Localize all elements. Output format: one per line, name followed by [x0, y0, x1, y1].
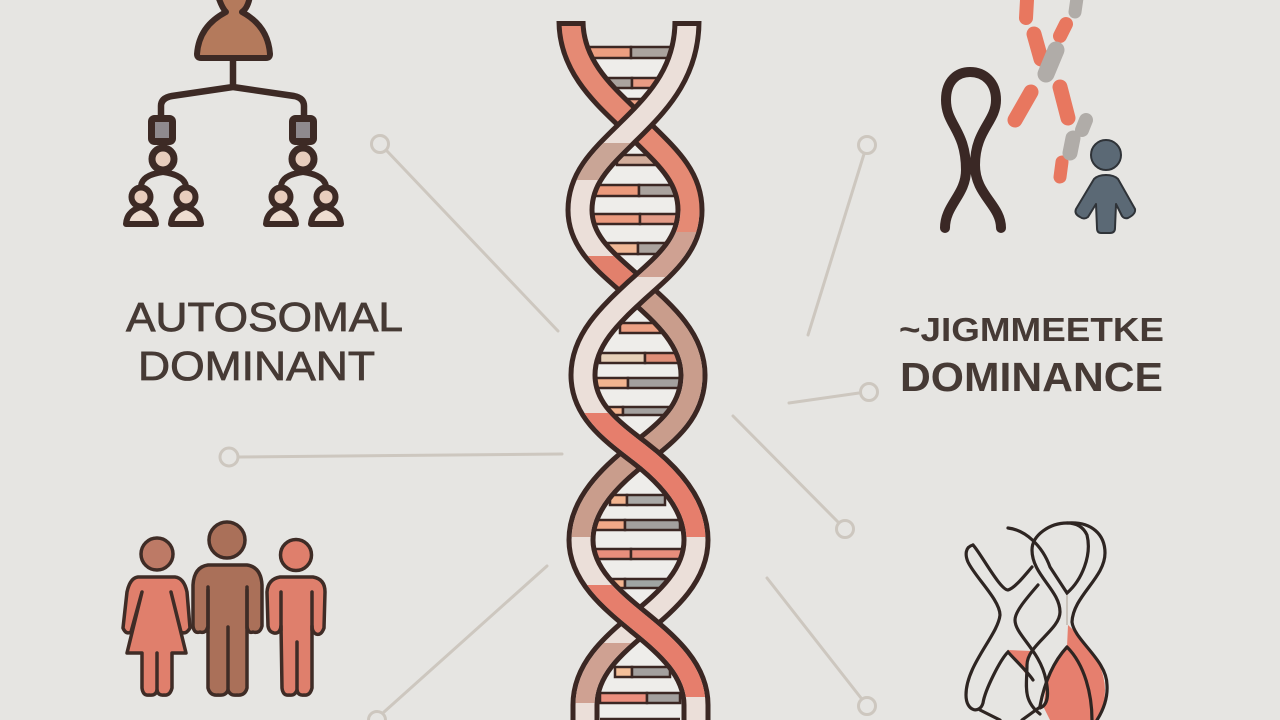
heading: autosomal dominant: DOMINANT — [138, 343, 375, 389]
icon: three people — [123, 522, 325, 695]
base pair rungs — [585, 47, 685, 719]
icon: blue-gray person — [1076, 140, 1135, 233]
strand A lower — [585, 540, 696, 720]
heading: autosomal dominant: AUTOSOMAL — [126, 294, 403, 340]
heading: garbled label and dominance: ~JIGMMEETKE — [899, 311, 1164, 348]
DNA double helix — [571, 21, 696, 720]
man — [193, 522, 262, 695]
heading: garbled label and dominance: DOMINANCE — [900, 354, 1163, 400]
centromere line — [1066, 595, 1068, 625]
second generation circles — [152, 148, 314, 170]
red fill areas — [1008, 625, 1105, 720]
carrier squares — [152, 118, 314, 142]
connector lines — [220, 136, 878, 720]
icon: broken crossing chromosome — [1015, 0, 1086, 177]
icon: family pedigree tree — [126, 0, 341, 224]
branch lines — [161, 58, 304, 116]
icon: chromosome loop — [945, 72, 1001, 228]
chromosome outlines — [966, 523, 1107, 720]
strand B lower — [581, 540, 696, 720]
strand A middle — [583, 210, 696, 540]
grandchildren — [126, 188, 341, 224]
heading: autosomal dominant — [126, 294, 403, 389]
heading: garbled label and dominance — [899, 311, 1164, 400]
woman — [123, 538, 190, 695]
helix inner light fill — [580, 58, 696, 720]
parent figure — [197, 0, 270, 58]
boy — [267, 540, 325, 695]
strand B upper — [580, 21, 687, 210]
icon: overlapping chromosomes with red fill — [966, 523, 1107, 720]
child branches — [141, 172, 326, 186]
strand B middle — [580, 210, 693, 540]
strand A upper — [571, 21, 690, 210]
